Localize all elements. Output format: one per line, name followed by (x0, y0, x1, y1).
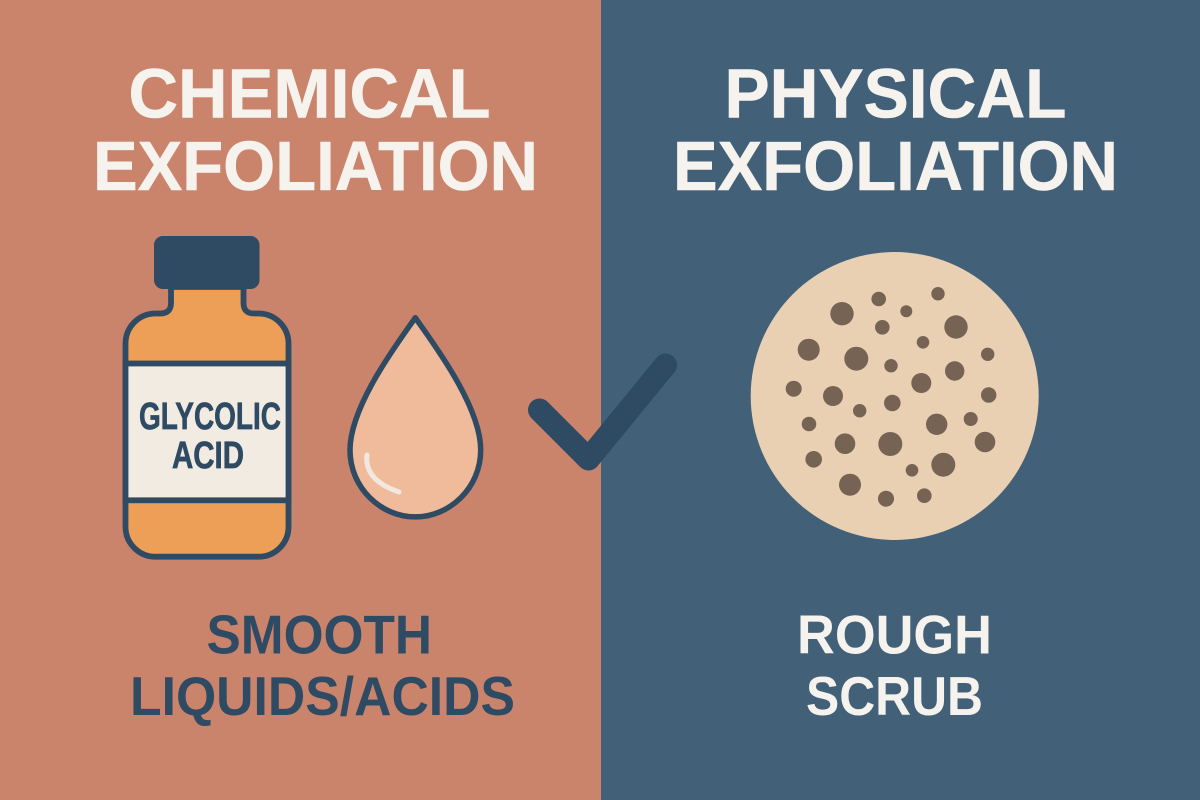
panel: chemical exfoliation (0, 0, 601, 800)
heading: physical exfoliation: PHYSICAL (724, 54, 1066, 132)
label text (139, 396, 281, 477)
caption: rough scrub: ROUGH (797, 604, 992, 666)
caption: rough scrub (797, 604, 992, 727)
panel: physical exfoliation (601, 0, 1200, 800)
bottle label (126, 364, 288, 500)
caption: rough scrub: SCRUB (806, 665, 983, 727)
heading: physical exfoliation: EXFOLIATION (673, 127, 1118, 205)
icon: liquid drop (350, 318, 481, 517)
icon: check mark (540, 365, 666, 459)
icon: glycolic acid bottle (126, 236, 288, 557)
icon: rough scrub circle (751, 252, 1039, 540)
bottle cap (154, 236, 260, 289)
caption: smooth liquids/acids: SMOOTH (206, 604, 432, 666)
heading: chemical exfoliation: CHEMICAL (128, 54, 490, 132)
heading: physical exfoliation (673, 54, 1118, 205)
label text: GLYCOLIC (139, 396, 281, 438)
caption: smooth liquids/acids: LIQUIDS/ACIDS (130, 665, 515, 727)
drop highlight (367, 455, 399, 492)
heading: chemical exfoliation: EXFOLIATION (93, 127, 538, 205)
bottle body (126, 287, 288, 557)
label text: ACID (172, 435, 244, 477)
scrub particles (786, 287, 996, 507)
caption: smooth liquids/acids (130, 604, 515, 727)
heading: chemical exfoliation (93, 54, 538, 205)
